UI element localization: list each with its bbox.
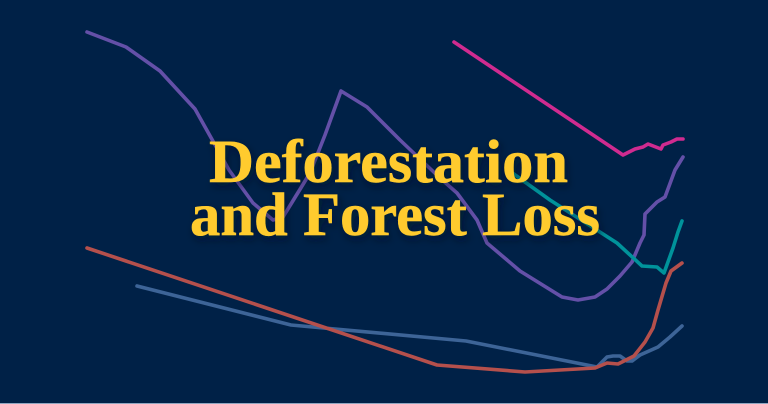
line: magenta series <box>454 42 683 155</box>
line: red series <box>87 248 682 372</box>
line: blue series <box>137 286 682 367</box>
line: teal series <box>511 172 682 273</box>
line chart: forest loss trends <box>87 32 683 372</box>
title line two: and Forest Loss <box>190 182 600 249</box>
title line one: Deforestation <box>209 129 568 196</box>
title <box>190 129 600 249</box>
line: purple series one <box>87 32 683 300</box>
